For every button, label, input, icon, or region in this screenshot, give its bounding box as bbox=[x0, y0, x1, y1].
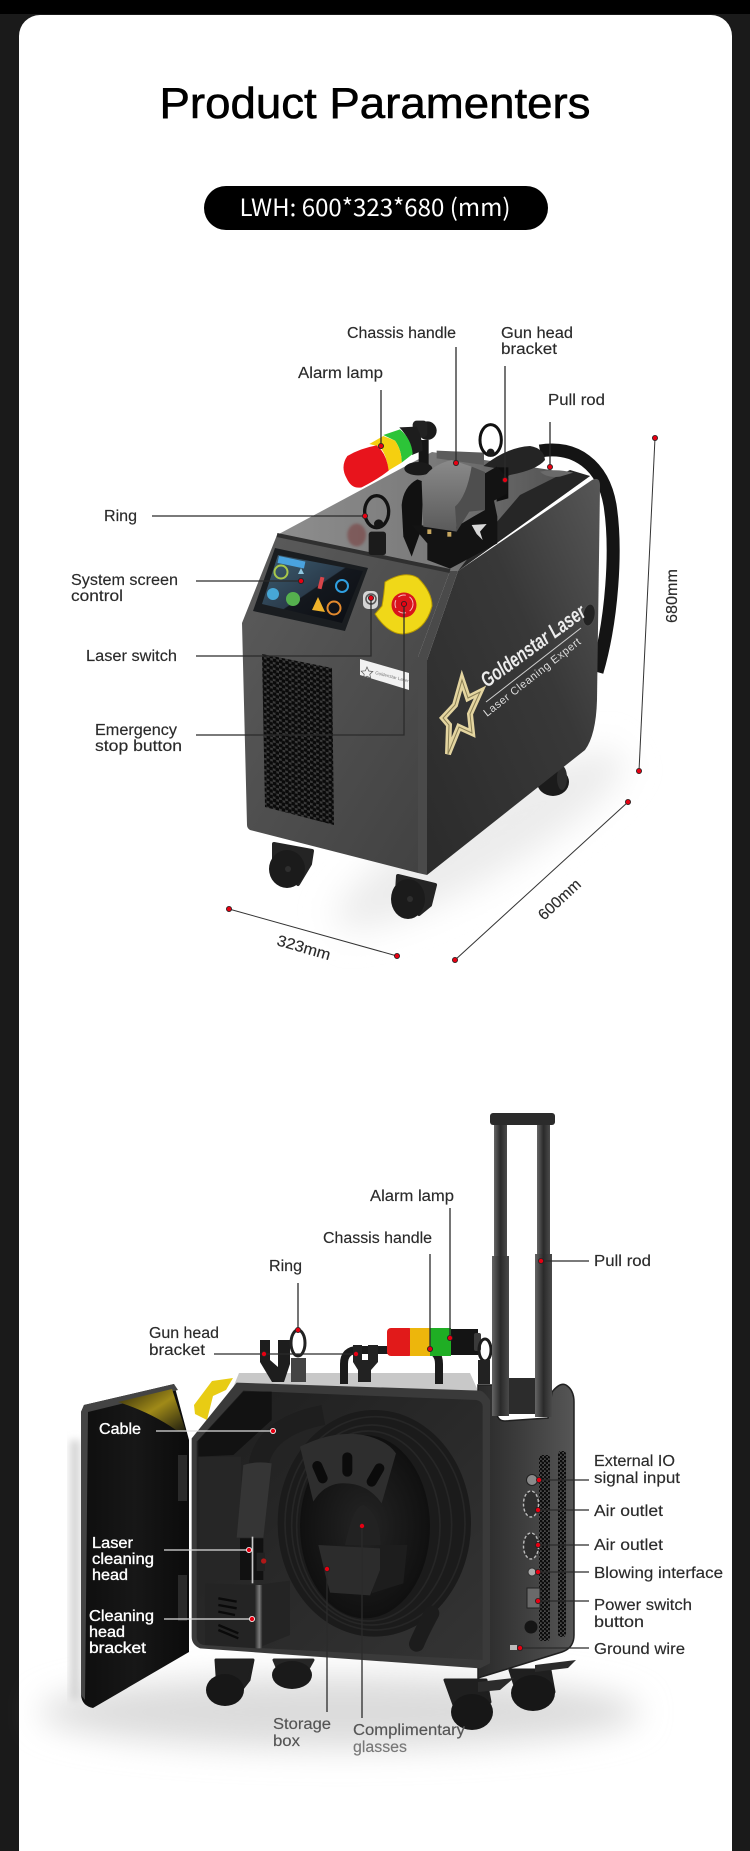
cable to gun bbox=[258, 1415, 323, 1467]
callout: alarm lamp: Alarm lamp bbox=[370, 1188, 454, 1205]
door shadow bbox=[70, 1440, 80, 1700]
callout: laser cleaning head: cleaning bbox=[92, 1551, 154, 1568]
callout: gun head bracket: Gun head bbox=[501, 325, 573, 342]
emergency stop button bbox=[375, 575, 432, 634]
callout: ground wire: Ground wire bbox=[594, 1641, 685, 1658]
callout: ring bbox=[269, 1258, 302, 1333]
callout: external io signal input: signal input bbox=[594, 1470, 681, 1487]
callout: pull rod: Pull rod bbox=[548, 392, 605, 409]
title: Product Paramenters bbox=[160, 79, 590, 128]
front frame bbox=[192, 1383, 490, 1668]
back vents bbox=[539, 1451, 566, 1641]
touch screen bbox=[253, 548, 368, 631]
callout: air outlet second: Air outlet bbox=[594, 1537, 664, 1554]
callout: complimentary glasses bbox=[353, 1523, 465, 1756]
complimentary glasses case bbox=[345, 1505, 381, 1545]
top left panel bbox=[198, 1392, 272, 1457]
machine front panel bbox=[242, 535, 450, 873]
dimension: 680mm height: 680mm bbox=[664, 569, 681, 623]
alarm lamp bbox=[387, 1328, 481, 1356]
dimension: 600mm length: 600mm bbox=[535, 876, 585, 924]
callout: ground wire bbox=[517, 1641, 685, 1658]
brand name text: Laser Cleaning Expert bbox=[481, 635, 585, 719]
callout: laser cleaning head: head bbox=[92, 1567, 128, 1584]
dimension: 323mm width bbox=[226, 906, 400, 964]
panel: machine front view with callouts bbox=[71, 325, 681, 964]
foam grip bbox=[483, 446, 545, 476]
cable tail bbox=[417, 1613, 432, 1644]
front top edge band bbox=[277, 535, 450, 571]
gold screws bbox=[427, 529, 451, 537]
callout: blowing interface bbox=[535, 1565, 723, 1582]
pull rod plate bbox=[540, 470, 573, 477]
storage pocket bbox=[318, 1545, 380, 1595]
brand name text bbox=[476, 600, 591, 719]
callout: power switch button: button bbox=[594, 1614, 644, 1631]
coil strand highlights bbox=[285, 1417, 465, 1630]
callout: laser switch bbox=[86, 595, 374, 665]
callout: air outlet: Air outlet bbox=[594, 1503, 664, 1520]
rod recess back wall bbox=[505, 1378, 539, 1414]
coil hole bbox=[300, 1435, 430, 1618]
lamp mount bbox=[404, 421, 437, 475]
handle bbox=[344, 1350, 439, 1384]
left sub panel bbox=[199, 1457, 241, 1580]
chassis handle plate bbox=[437, 451, 484, 465]
fan shaped bracket bbox=[300, 1434, 396, 1503]
alarm lamp bbox=[343, 427, 423, 488]
callout: power switch button: Power switch bbox=[594, 1597, 692, 1614]
callout: emergency stop button: Emergency bbox=[95, 722, 177, 739]
gun bracket base bbox=[412, 467, 508, 569]
product label sticker bbox=[360, 659, 410, 690]
machine interior and hardware bbox=[192, 1383, 490, 1668]
callout: ring: Ring bbox=[269, 1258, 302, 1275]
front ring bbox=[365, 496, 389, 555]
interior wall bbox=[197, 1391, 483, 1660]
brand name text: Goldenstar Laser bbox=[476, 600, 591, 692]
callout: pull rod bbox=[547, 392, 605, 470]
coil outer wrap bbox=[278, 1410, 471, 1637]
gun head bracket right bbox=[353, 1345, 378, 1382]
callout: gun head bracket bbox=[149, 1325, 359, 1359]
door bbox=[81, 1384, 189, 1708]
callout: alarm lamp bbox=[370, 1188, 454, 1341]
laser head bbox=[240, 1537, 266, 1583]
callout: gun head bracket: bracket bbox=[501, 341, 558, 358]
callout: system screen control: control bbox=[71, 588, 123, 605]
callout: laser cleaning head bbox=[92, 1535, 252, 1584]
top black band bbox=[0, 0, 750, 14]
callout: ring: Ring bbox=[104, 508, 137, 525]
callout: air outlet bbox=[535, 1503, 664, 1520]
wheels bbox=[206, 1660, 576, 1730]
back pocket bbox=[372, 1545, 407, 1593]
reflection bbox=[347, 524, 366, 546]
callout: cable bbox=[99, 1421, 276, 1438]
callout: emergency stop button bbox=[95, 601, 407, 755]
callout: cleaning head bracket: Cleaning bbox=[89, 1608, 154, 1625]
machine side panel bbox=[427, 479, 600, 875]
dimensions pill bbox=[204, 186, 548, 230]
callout: cable: Cable bbox=[99, 1421, 141, 1438]
callout: power switch button bbox=[535, 1597, 692, 1631]
front chamfer strip bbox=[418, 571, 458, 875]
gun head strap bbox=[497, 467, 508, 502]
vent bbox=[262, 654, 334, 825]
top hardware: lamp, gun head, ring bbox=[343, 421, 573, 569]
callout: chassis handle bbox=[347, 325, 459, 466]
callout: emergency stop button: stop button bbox=[95, 738, 182, 755]
callout: laser cleaning head: Laser bbox=[92, 1535, 133, 1552]
callout: system screen control bbox=[71, 572, 304, 605]
callout: cleaning head bracket bbox=[89, 1608, 255, 1657]
side port bbox=[581, 603, 597, 627]
callout: system screen control: System screen bbox=[71, 572, 178, 589]
callout: gun head bracket: Gun head bbox=[149, 1325, 219, 1342]
callout: pull rod: Pull rod bbox=[594, 1253, 651, 1270]
yellow stop button behind bbox=[194, 1378, 233, 1420]
machine side panel bbox=[478, 1384, 574, 1678]
gun head block side bbox=[455, 467, 485, 532]
dimension: 323mm width: 323mm bbox=[275, 933, 332, 964]
callout: gun head bracket: bracket bbox=[149, 1342, 206, 1359]
callout: alarm lamp: Alarm lamp bbox=[298, 365, 383, 382]
floor shadow bbox=[40, 1676, 640, 1748]
dimension: 680mm height bbox=[636, 435, 681, 774]
dimension: 600mm length bbox=[452, 799, 631, 963]
rear ring bbox=[478, 1339, 491, 1384]
machine top panel bbox=[277, 452, 590, 571]
top panel strip bbox=[230, 1373, 480, 1395]
callout: external io signal input: External IO bbox=[594, 1453, 675, 1470]
wheels bbox=[269, 766, 569, 919]
callout: chassis handle: Chassis handle bbox=[347, 325, 456, 342]
ring bbox=[291, 1330, 306, 1382]
callout: complimentary glasses: Complimentary bbox=[353, 1722, 465, 1739]
cable bbox=[540, 450, 613, 672]
dark block shadow on top bbox=[458, 470, 590, 571]
product label sticker: Goldenstar Laser bbox=[375, 670, 410, 683]
gun bracket rear dark bbox=[402, 479, 423, 557]
callout: storage box bbox=[273, 1566, 331, 1750]
callout: storage box: box bbox=[273, 1733, 300, 1750]
dimensions pill: LWH: 600*323*680 (mm) bbox=[240, 188, 510, 223]
gold star logo bbox=[443, 680, 480, 754]
callout: storage box: Storage bbox=[273, 1716, 331, 1733]
foam sleeve bbox=[237, 1462, 272, 1538]
callout: blowing interface: Blowing interface bbox=[594, 1565, 723, 1582]
callout: pull rod bbox=[538, 1253, 651, 1270]
wing nut bbox=[472, 524, 487, 540]
gun head bracket left bbox=[260, 1340, 290, 1382]
gun head block front bbox=[422, 460, 472, 532]
laser switch key bbox=[363, 591, 378, 609]
callout: external io signal input bbox=[536, 1453, 681, 1487]
pull rod handle bbox=[490, 1113, 555, 1417]
callout: complimentary glasses: glasses bbox=[353, 1739, 407, 1756]
floor shadow bbox=[318, 725, 642, 955]
rear connectors bbox=[510, 1474, 540, 1650]
callout: chassis handle: Chassis handle bbox=[323, 1230, 432, 1247]
callout: cleaning head bracket: head bbox=[89, 1624, 125, 1641]
callout: ring bbox=[104, 508, 368, 525]
panel: machine back view with callouts bbox=[40, 1113, 723, 1756]
callout: gun head bracket bbox=[501, 325, 573, 483]
storage box bbox=[205, 1581, 290, 1648]
callout: air outlet second bbox=[535, 1537, 664, 1554]
callout: chassis handle bbox=[323, 1230, 433, 1352]
callout: alarm lamp bbox=[298, 365, 384, 449]
rear ring bbox=[480, 425, 501, 457]
callout: laser switch: Laser switch bbox=[86, 648, 177, 665]
callout: cleaning head bracket: bracket bbox=[89, 1640, 147, 1657]
